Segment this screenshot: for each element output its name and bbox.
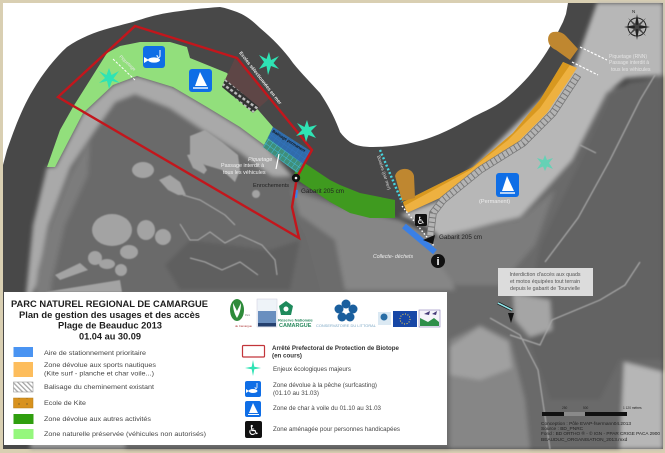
compass rose: N xyxy=(632,9,635,14)
panel: legend xyxy=(4,292,447,445)
zone naturelle: green xyxy=(47,42,296,167)
central piquetage label xyxy=(221,154,279,176)
red biotope protection boundary xyxy=(58,26,312,238)
logo: small round emblem xyxy=(378,312,391,325)
legend: biotope boundary xyxy=(242,345,399,360)
interdiction note: Interdiction d'accès aux quads xyxy=(509,272,581,278)
kite school: west xyxy=(395,169,415,201)
legend title xyxy=(11,299,208,342)
gabarit marker west xyxy=(253,174,344,198)
map credits: Fond : BD ORTHO ® - © IGN - PPAR CRIGE PACA 2900 xyxy=(541,430,660,437)
dark kite sector in sea xyxy=(225,58,270,113)
checker strip xyxy=(222,79,259,113)
central piquetage label: Piquetage xyxy=(248,157,272,163)
legend: sand yacht xyxy=(245,401,381,417)
icon: information xyxy=(431,254,445,268)
gabarit marker east: Gabarit 205 cm xyxy=(439,234,482,241)
legend: ecological issues: Enjeux écologiques majeurs xyxy=(273,366,352,373)
legend: preserved natural zone: Zone naturelle préservée (véhicules non autorisés) xyxy=(44,431,206,438)
map credits: Conception : Pôle EVAP-fsermann04.2013 xyxy=(541,421,631,427)
legend: kite school xyxy=(14,398,86,408)
interdiction note: et motos équipées tout terrain xyxy=(510,279,580,285)
balisage hatched path xyxy=(430,75,578,237)
legend title: PARC NATUREL REGIONAL DE CAMARGUE xyxy=(11,299,208,309)
legend: fishing xyxy=(245,381,377,397)
scale bar: 1 120 mètres xyxy=(623,406,642,410)
legend: other activities xyxy=(14,414,152,424)
logo: european union xyxy=(393,311,417,327)
icon: sail permanent xyxy=(479,173,519,205)
icon: accessibility on map xyxy=(415,214,427,227)
logo: parc naturel xyxy=(230,299,252,328)
legend: water sports: (Kite surf - planche et char voile...) xyxy=(44,370,154,378)
small access dots xyxy=(402,206,434,246)
waste collection label: Collecte- déchets xyxy=(373,254,413,260)
map credits: Source : BD_PNRC xyxy=(541,426,584,432)
icon: sail permanent: (Permanent) xyxy=(479,199,510,205)
west piquetage line: Piquetage xyxy=(118,54,137,72)
logo: reserve nationale camargue: Réserve Nationale xyxy=(278,318,313,322)
legend: fishing: (01.10 au 31.03) xyxy=(273,390,319,397)
legend title: 01.04 au 30.09 xyxy=(79,332,141,342)
blue grid zone: Balisage permanent xyxy=(271,129,307,153)
scale bar: 500 xyxy=(583,406,589,410)
logo: conservatoire du littoral xyxy=(316,300,376,328)
blue parking strip xyxy=(404,226,435,252)
label: sea corridor: Ecoles sélectionnées en mer xyxy=(237,51,283,106)
logo: blue landscape xyxy=(257,299,277,327)
zone other activities: dark green xyxy=(293,160,395,218)
east piquetage lines: tous les véhicules xyxy=(611,67,651,73)
scale bar: 250 xyxy=(562,406,568,410)
legend: parking xyxy=(14,347,146,357)
interdiction note: depuis le gabarit de Tourvielle xyxy=(510,286,580,292)
legend: water sports: Zone dévolue aux sports nautiques xyxy=(44,362,157,369)
dotted buoy line xyxy=(380,150,402,202)
gabarit marker east xyxy=(423,234,482,244)
legend: water sports xyxy=(14,362,157,378)
west piquetage line xyxy=(113,54,137,80)
legend: fishing: Zone dévolue à la pêche (surfcasting) xyxy=(273,382,377,389)
legend: accessibility xyxy=(245,421,401,439)
legend: biotope boundary: (en cours) xyxy=(272,352,302,360)
east piquetage lines xyxy=(572,47,651,75)
icon: information: i xyxy=(436,256,440,268)
zone sports nautiques: orange xyxy=(403,62,577,213)
logo: parc naturel: de Camargue xyxy=(235,324,252,328)
central piquetage label: tous les véhicules xyxy=(223,170,266,176)
legend: preserved natural zone xyxy=(14,429,206,439)
blue grid zone xyxy=(263,127,312,173)
legend title: Plan de gestion des usages et des accès xyxy=(19,310,200,320)
buoy label: Bouées (par mer) xyxy=(376,155,392,191)
legend: marked path: Balisage du cheminement existant xyxy=(44,384,154,391)
logo: reserve nationale camargue xyxy=(278,301,313,329)
scale bar xyxy=(542,406,642,416)
legend: accessibility: ♿ xyxy=(247,423,260,439)
gabarit marker west: Enrochements xyxy=(253,183,289,189)
map credits xyxy=(541,421,660,443)
legend: kite school: Ecole de Kite xyxy=(44,400,86,407)
compass rose xyxy=(624,9,650,40)
kite school: east xyxy=(548,32,578,60)
legend title: Plage de Beauduc 2013 xyxy=(58,320,162,330)
legend: ecological issues xyxy=(245,360,352,376)
icon: fishing on map xyxy=(143,46,165,68)
logo: natura xyxy=(419,310,440,327)
logo: reserve nationale camargue: CAMARGUE xyxy=(279,323,312,329)
legend: other activities: Zone dévolue aux autres activités xyxy=(44,416,152,423)
map credits: BEAUDUC_ORGANISATION_2013.mxd xyxy=(541,437,628,443)
east piquetage lines: Piquetage (RNN) xyxy=(609,54,647,60)
icon: sail on map xyxy=(189,69,212,92)
legend: sand yacht: Zone de char à voile du 01.10 au 31.03 xyxy=(273,405,381,412)
legend: accessibility: Zone aménagée pour personnes handicapées xyxy=(273,426,401,433)
central piquetage label: Passage interdit à xyxy=(221,163,264,169)
interdiction note xyxy=(498,268,593,296)
logo: parc naturel: Parc xyxy=(245,314,251,317)
icon: accessibility on map: ♿ xyxy=(417,216,425,227)
ecological stars on map xyxy=(99,52,553,171)
tourvielle marker xyxy=(498,303,514,323)
logo: conservatoire du littoral: CONSERVATOIRE DU LITTORAL xyxy=(316,324,376,328)
legend: parking: Aire de stationnement prioritaire xyxy=(44,350,146,357)
legend: biotope boundary: Arrêté Prefectoral de Protection de Biotope xyxy=(272,345,399,352)
east piquetage lines: Passage interdit à xyxy=(609,60,649,66)
gabarit marker west: Gabarit 205 cm xyxy=(301,188,344,195)
legend: marked path xyxy=(14,382,154,392)
